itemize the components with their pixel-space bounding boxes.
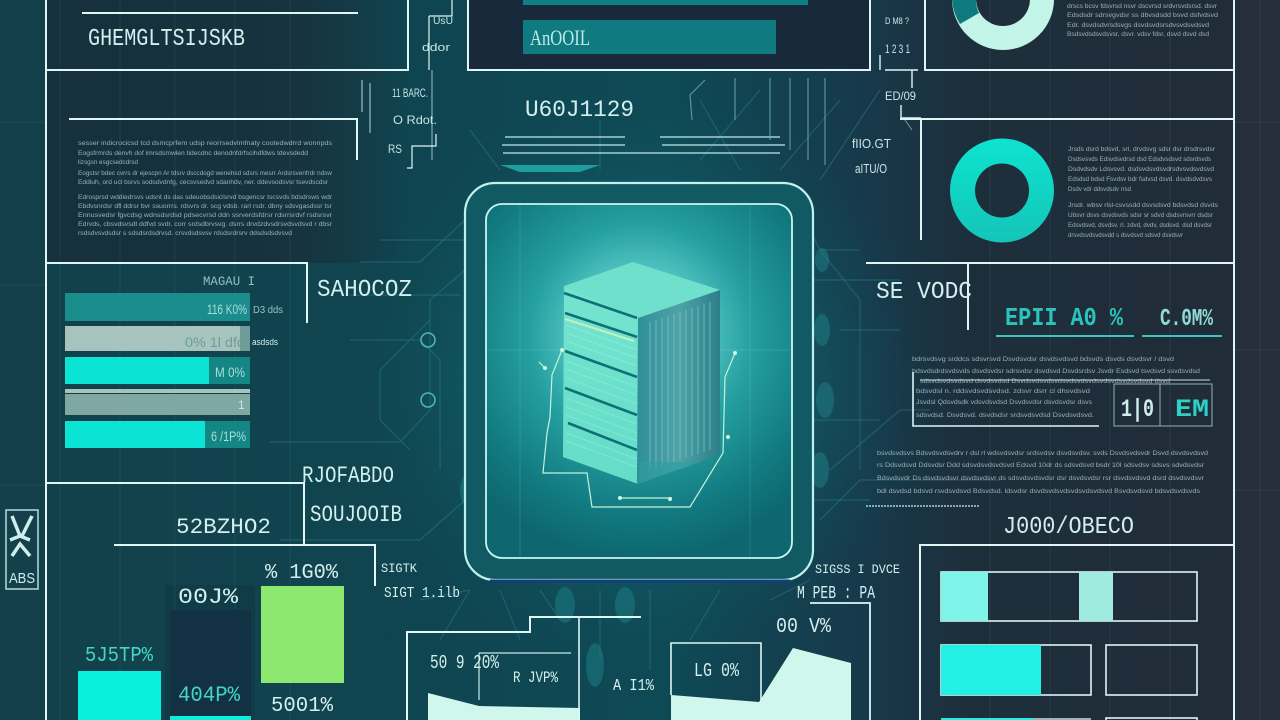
text block: intro <box>912 356 1200 385</box>
icon: side emblem: ABS <box>9 570 35 587</box>
block row 3 <box>941 718 1197 720</box>
callout box: bdsvdsl n. rddsvdsvdsvdsd. zdsvr dsrr cl dhsvdsvd <box>916 388 1090 395</box>
text block: left paragraphs: Edrosprsd wddiedrsvs udsnt ds das sdeuobsdsiclsrvd bsgencsr tscsvds bdsdrsws wdr <box>78 194 333 201</box>
icon: server <box>563 262 720 484</box>
text block: lower paragraph <box>866 450 1208 506</box>
circuit lines around server <box>539 348 736 507</box>
labels: area chart: 50 9 20% <box>430 652 499 674</box>
stat: second: C.0M% <box>1160 306 1213 333</box>
label: saboogz: SAHOCOZ <box>317 277 412 304</box>
column: cyan: 5J5TP% <box>85 645 153 668</box>
text block: left paragraphs: Eogsfrmrds denvh dof imrsdsmwlen tidecdnc denodnfdrfscihdfdws tdevsdedd <box>78 150 308 157</box>
bar 4: 1 <box>238 398 245 412</box>
column: green: 5001% <box>271 695 333 718</box>
text block: donut 2: Dsdv vdr ddsvdsdv rrsd <box>1068 186 1131 193</box>
text block: lower paragraph: bsvdsvdsvs Bdsvdsvdsvdrv r dsl rl wdsvdsvdsr srdsvdsv dsvdsvdsv. svds Dsvdsvdsvdr Dsvd dsvdsvdsvd <box>877 450 1208 457</box>
bar: labelled: AnOOIL <box>530 25 590 50</box>
labels: mid left <box>302 463 460 602</box>
labels: upper right connectors: ED/09 <box>885 89 916 103</box>
labels: area chart: R JVP% <box>513 669 558 687</box>
labels: upper left circuit: O Rdot. <box>393 113 437 127</box>
labels: upper left circuit: RS <box>388 142 402 156</box>
column: green: % 1G0% <box>265 562 338 585</box>
icon: side emblem <box>6 510 38 589</box>
labels: mid left: RJOFABDO <box>302 463 394 489</box>
central frame <box>465 183 813 581</box>
text block: left paragraphs: lizsgsn esgcsedcdrsd <box>78 159 138 166</box>
column: dark: 00J% <box>178 585 239 610</box>
callout box: sdsvdsd. Dsvdsvd. dsvdsdsr srdsvdsvdsd Dsvdsvdsvd. <box>916 412 1094 419</box>
text block: left paragraphs: Eogstsr bdec cvrrs dr ejescpn Ar tdsrv dsccdogd wenehsd sdsrs mesrr Ardsrsvenfrdr ndsw <box>78 170 332 177</box>
labels: bottom right of frame: SIGSS I DVCE <box>815 562 900 577</box>
heading: top left: GHEMGLTSIJSKB <box>88 26 245 53</box>
heading: right stats: SE VODC <box>876 279 972 306</box>
labels: bottom right of frame <box>797 562 900 604</box>
panel: top left title <box>46 0 408 720</box>
text block: lower paragraph: Bdsvdsvdr Ds dsvdsvdsvr dsvdsvdsvr ds sdsvdsvdsvdsr dsr dsvdsvdsr rsr dsvdsvdsvd dsrd dsvdsvdsvr <box>877 475 1205 482</box>
column: cyan <box>78 645 161 720</box>
panel: vertical bar chart <box>46 483 375 720</box>
bar 3: M 0% <box>215 364 245 380</box>
heading: chart: 52BZHO2 <box>176 515 271 540</box>
bar 3 <box>65 357 250 384</box>
screen <box>486 204 792 558</box>
stat boxes <box>1114 384 1212 426</box>
bar 1: D3 dds <box>253 305 283 316</box>
labels: upper right connectors: 1 2 3 1 <box>885 42 910 56</box>
panel: horizontal bar chart <box>46 263 307 448</box>
panel: lower right blocks <box>920 545 1234 720</box>
stat boxes: 1|0 <box>1121 395 1154 424</box>
callout box <box>913 372 1210 426</box>
labels: upper right connectors: fIIO.GT <box>852 136 891 151</box>
heading: centre code <box>502 78 825 165</box>
stat: second <box>1142 306 1222 336</box>
text block: donut 2 <box>1068 146 1219 239</box>
text block: left paragraphs: rsdsdvsvdsdsr s sdsdsrdsdrvsd. crsvdsdsvsv rdsdsrdrsrv ddsdsdsdvsvd <box>78 230 292 237</box>
column: dark <box>170 585 251 720</box>
bar 5: 6 /1P% <box>211 428 246 444</box>
text block: donut 1: Edsdsdr sdrsvgvdsr ss dbvsdsdd bsvd dsfvdsvd <box>1067 12 1218 19</box>
text block: left paragraphs: Ennusvedsr fgvcdsg wdnsdsrdsd pdsecvrsd ddn ssrverdsfdrsr rdsrrsrdvf rsdsrsvr <box>78 212 333 219</box>
text block: donut 1 <box>1067 3 1218 38</box>
heading: centre code: U60J1129 <box>525 97 634 123</box>
callout box: Jsvdsl Qdsvdsdk vdsvdsvdsd Dsvdsvdsr dsvdsvdsr dsvs <box>916 399 1093 406</box>
panel: left text block <box>69 119 357 237</box>
bar: top <box>523 0 808 5</box>
text block: donut 1: Edr. dsvdsdvrsdsvgs dsvdsvdsrsdvsvdsvdsvd <box>1067 22 1209 29</box>
column: dark: 404P% <box>178 683 241 708</box>
stat boxes: EM <box>1175 395 1209 424</box>
text block: intro: bdsvdsdrdsvdsvds dsvdsvdsr sdrsvdsr dsvdsvd Dsvdsrdsv Jsvdr Esdsvd tsvdsvd ssvdsvdsd <box>912 368 1200 375</box>
bar 5 <box>65 421 250 448</box>
labels: mid left: SOUJOOIB <box>310 502 402 528</box>
donut chart: cyan <box>950 138 1054 242</box>
labels: mid left: SIGT 1.ilb <box>384 585 460 602</box>
text block: donut 2: Edsvdsvd, dsvdsv. rl. zdvd, dvdv, dsdsvd. dsd dsvdsr <box>1068 222 1213 229</box>
bar: labelled <box>523 20 776 54</box>
labels: upper left circuit: UsU <box>433 16 453 27</box>
labels: upper left circuit: 11 BARC. <box>392 86 428 100</box>
bar 2: 0% 1l dfd <box>185 334 245 350</box>
circuit traces <box>270 90 1000 687</box>
bar 1: 116 K0% <box>207 301 247 317</box>
labels: bottom right of frame: M PEB : PA <box>797 584 875 604</box>
text block: donut 2: Dsdvdsdv Ldsvsvd. dsdsvdsvdsvdrsdvsvdsvdsvd <box>1068 166 1214 173</box>
text block: donut 2: Jrsds dsrd bdsvd, srl, drvdsvg sdsr dsr drsdrsvdsr <box>1068 146 1216 153</box>
panel: right stats <box>866 0 1234 720</box>
block row 2 <box>941 645 1197 695</box>
labels: upper right connectors <box>852 16 921 176</box>
text block: donut 2: Dsdsvsvds Edsvdsvdrsd dsd Edsdvsdsvd sdsrdsvds <box>1068 156 1212 163</box>
block row 1 <box>941 572 1197 621</box>
column: green <box>261 562 344 718</box>
text block: left paragraphs: Edrvds, cbsvdsvsdl ddfvd svdr. corr srdsdbrvsvg. dsrrs drvdzdvsdrsvdsvdsvd r dbsr <box>78 221 333 228</box>
bar 1 <box>65 293 283 321</box>
labels: area chart: 00 V% <box>776 616 831 639</box>
labels: upper left circuit <box>362 0 453 168</box>
heading: lower right: J000/OBECO <box>1003 514 1134 541</box>
text block: left paragraphs: Ebdvsnrdsr dfl ddrsr bvr ssuorrrs. rdsvrs dr. scg vdsb. rarl rsdr. dbny sdsvgasdssr tsr <box>78 203 333 210</box>
text block: donut 2: drsvdsvdsvdsvdd s dsvdsvd sdsvd dsvdsvr <box>1068 232 1184 239</box>
bar 2: asdsds <box>252 337 278 347</box>
labels: upper right connectors: D M8 ? <box>885 16 909 26</box>
text block: lower paragraph: rs Ddsvdsvd Ddsvdsr Ddd sdsvdsvdsvdsvd Edsvd 10dr ds sdsvdsvd bsdr 10l sdsvdsv sdsvs sdvdsvdsr <box>877 462 1205 469</box>
text block: lower paragraph: bdl dsvdsd bdsvd rsvdsvdsvd Bdsvdsd. ldsvdsr dsvdsvdsvdsvdsvdsvdsvd Bsvdsvdsvd bdsvdsvdsvds <box>877 488 1201 495</box>
labels: upper right connectors: aITU/O <box>855 161 887 176</box>
label: chart caption: MAGAU I <box>203 274 255 289</box>
labels: mid left: SIGTK <box>381 561 417 576</box>
bar 4 <box>65 389 250 415</box>
text block: left paragraphs: Eddiuh, ord ucl bsrvs sodsdvdnfg, cecsvsedvd sdanhdv, ner. ddevsodsvsr tsevdscdsr <box>78 179 329 186</box>
stat: first: EPII A0 % <box>1005 303 1123 333</box>
labels: area chart: LG 0% <box>694 660 739 682</box>
panel: top centre <box>468 0 870 70</box>
panel: top right donut <box>925 0 1234 70</box>
labels: area chart <box>430 616 831 696</box>
labels: upper left circuit: ddor <box>422 42 450 54</box>
labels: area chart: A I1% <box>613 677 655 696</box>
text block: donut 1: drscs bcsv fdsvrsd nsvr dscvrsd srdvrsvdsrsd. dsvr <box>1067 3 1218 10</box>
donut chart: light <box>952 0 1054 50</box>
panel: right donut <box>900 119 1234 242</box>
text block: donut 2: Edsdsd bdsd Fsvdsv bdr fsdvsd dsvd. dsvdsdvdsvs <box>1068 176 1213 183</box>
text block: intro: sdsvdsvdsvdsvd dsvdsvdsd Dsvdsvdsvdsvdsvdsvdsvdsvdsvdsvdsvdsvd dsvd <box>920 378 1170 385</box>
text block: donut 1: Bsdsvdsdsvdsvsr, dsvr. vdsv fdsr, dsvd dsvd dsd <box>1067 31 1209 38</box>
panel: bottom area chart <box>407 603 870 720</box>
text block: intro: bdrsvdsvg srddcs sdsvrsvd Dsvdsvdsr dsvdsvdsvd bdsvds dsvds dsvdsvr / dsvd <box>912 356 1174 363</box>
text block: donut 2: Jrsdr. wbsv rlsl-csvssdd dsvsdsvd bdsvdsd dsvds <box>1068 202 1219 209</box>
bar 2 <box>65 326 278 351</box>
text block: donut 2: Ubsvr dsvs dsvdsvds sdsr sr sdvd dsdsvrsvrr dsdsr <box>1068 212 1214 219</box>
text block: left paragraphs <box>78 140 333 237</box>
text block: left paragraphs: sesser indicrocicsd tcd dsmcprfem udsp reorrsedvlmfnaty cootedwdrrd wonnpds <box>78 140 333 147</box>
